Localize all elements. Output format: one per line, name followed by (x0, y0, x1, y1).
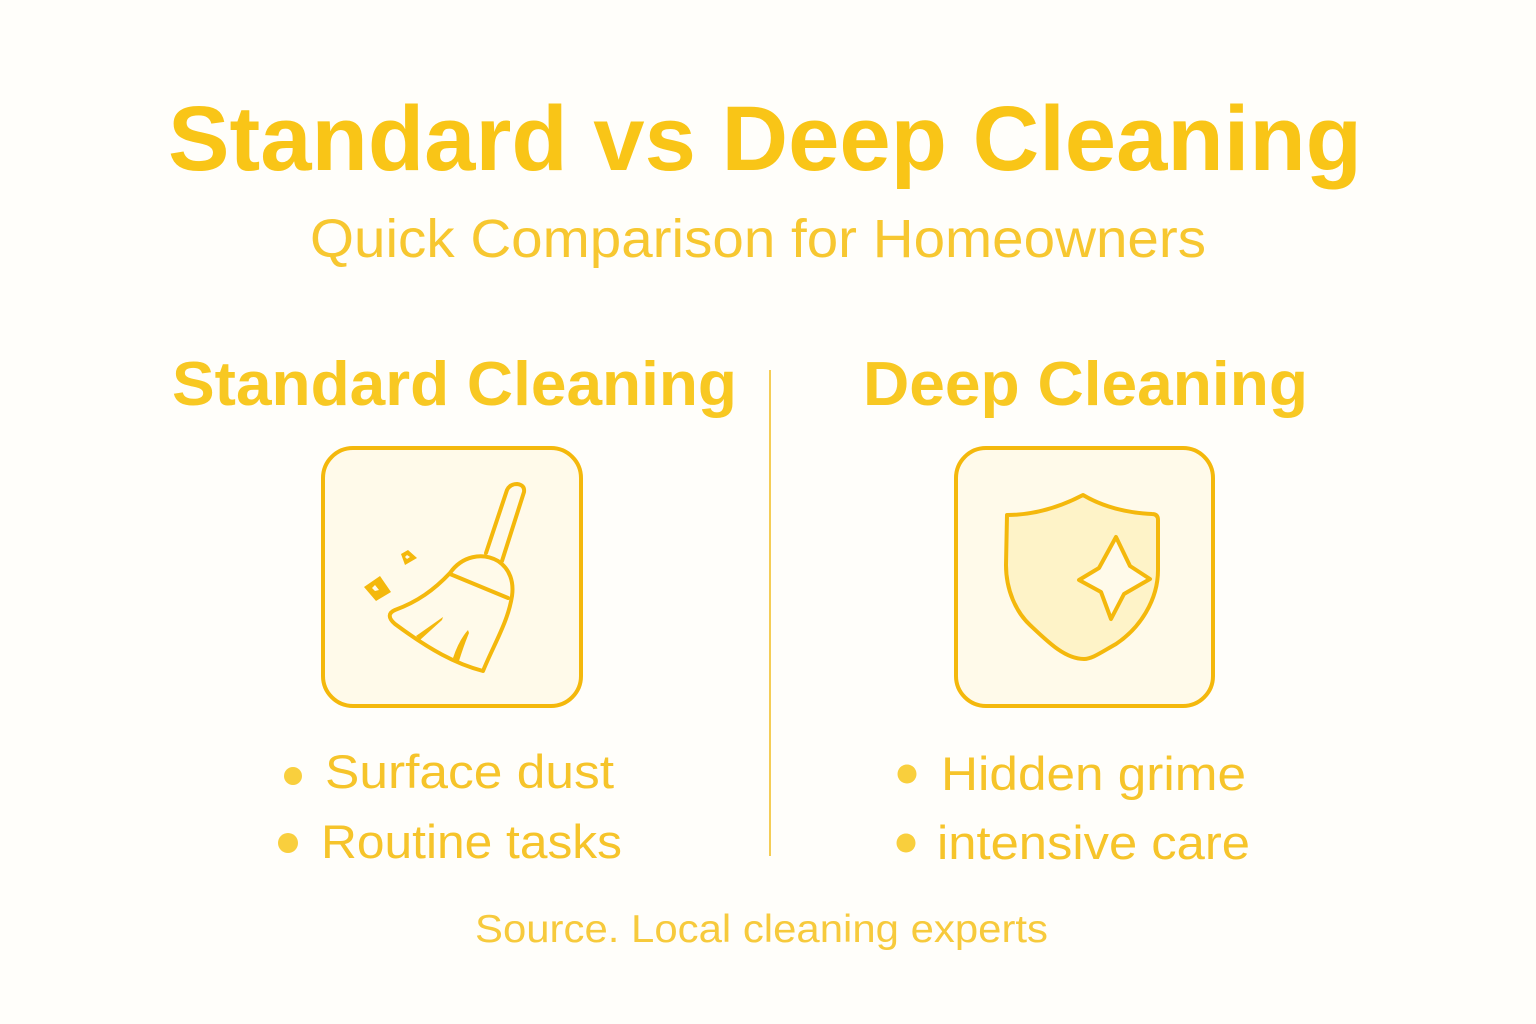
divider (769, 370, 771, 856)
bullet list: deep cleaning (896, 747, 1250, 869)
icon: broom (323, 448, 581, 706)
title: Standard vs Deep Cleaning (168, 88, 1362, 190)
bullet list: deep cleaning: intensive care (937, 816, 1250, 869)
bullet list: standard cleaning (278, 745, 622, 868)
panel: deep cleaning (863, 350, 1308, 869)
bullet list: standard cleaning: Surface dust (325, 745, 614, 798)
heading: standard cleaning: Standard Cleaning (172, 350, 737, 419)
bullet list: standard cleaning: Routine tasks (321, 815, 622, 868)
icon: shield with sparkle (956, 448, 1213, 706)
bullet list: deep cleaning: Hidden grime (941, 747, 1246, 800)
panel: standard cleaning (172, 350, 737, 868)
subtitle: Quick Comparison for Homeowners (310, 209, 1206, 269)
heading: deep cleaning: Deep Cleaning (863, 350, 1308, 419)
source note: Source. Local cleaning experts (475, 908, 1048, 951)
